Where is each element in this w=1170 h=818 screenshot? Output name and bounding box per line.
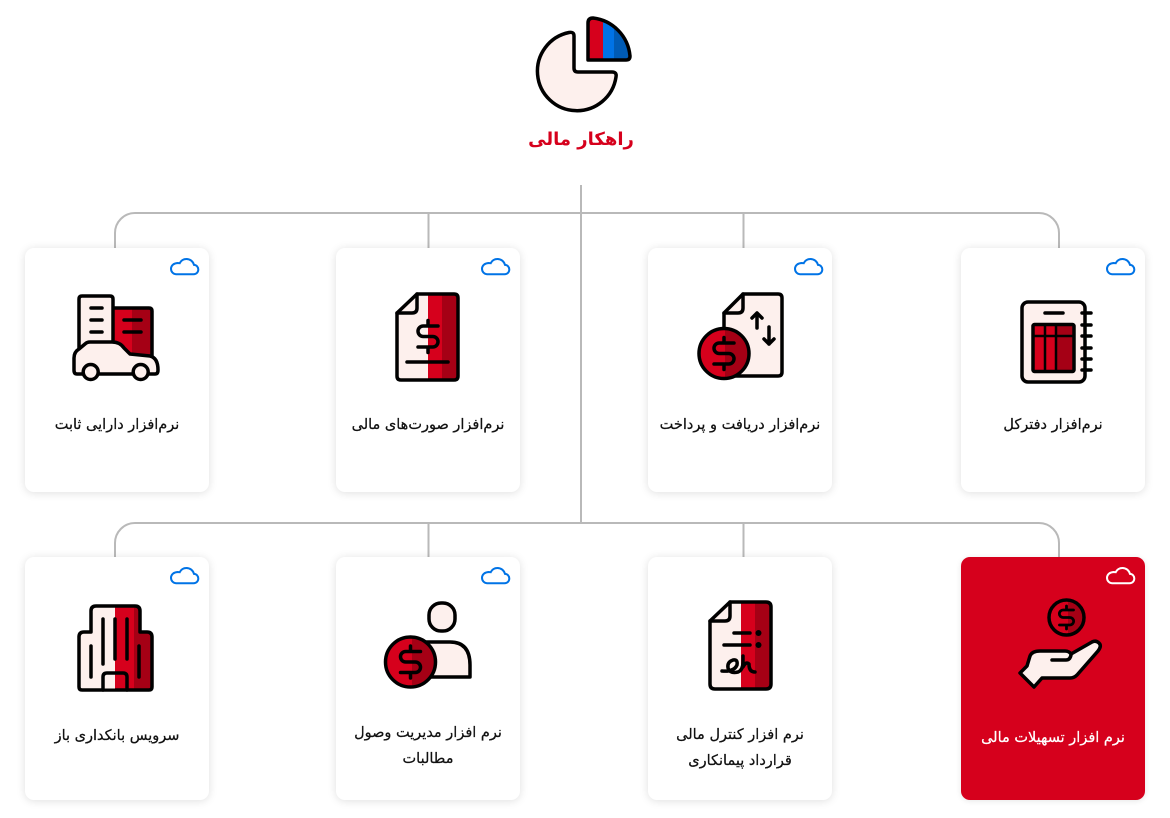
icon: cloud	[794, 258, 824, 276]
icon: bank building	[77, 604, 154, 692]
icon: cloud	[1106, 258, 1136, 276]
label	[354, 725, 502, 767]
icon: buildings and car	[72, 294, 160, 382]
label: نرم‌افزار دارایی ثابت	[55, 417, 179, 433]
icon: person with coin	[384, 601, 472, 689]
icon: signed contract	[708, 600, 773, 691]
label: نرم افزار تسهیلات مالی	[981, 730, 1125, 746]
title: راهکار مالی	[528, 129, 634, 150]
icon: hand with coin	[1018, 598, 1102, 689]
label: نرم افزار کنترل مالی	[676, 727, 804, 743]
panel: receivables management software	[336, 557, 520, 800]
panel: fixed assets software	[25, 248, 209, 492]
panel: ledger software	[961, 248, 1145, 492]
icon: cloud	[481, 258, 510, 276]
label: نرم افزار مدیریت وصول	[354, 725, 502, 741]
icon: cloud	[170, 258, 200, 276]
icon: document with coin and arrows	[697, 292, 784, 380]
icon: cloud	[1106, 567, 1136, 584]
label: نرم‌افزار دفترکل	[1003, 417, 1103, 433]
icon: notebook	[1020, 300, 1093, 384]
icon: pie chart	[536, 16, 632, 112]
label: قرارداد پیمانکاری	[688, 753, 792, 769]
panel: open banking service	[25, 557, 209, 800]
icon: statement document	[395, 292, 460, 382]
panel: financial statements software	[336, 248, 520, 492]
icon: cloud	[481, 567, 510, 584]
icon: cloud	[170, 567, 200, 584]
label: سرویس بانکداری باز	[55, 728, 179, 744]
panel: financial facilities software	[961, 557, 1145, 800]
label	[676, 727, 804, 769]
panel: receipts and payments software	[648, 248, 832, 492]
label: نرم‌افزار دریافت و پرداخت	[660, 417, 820, 433]
panel: financial control and contracting software	[648, 557, 832, 800]
label: مطالبات	[403, 751, 453, 767]
label: نرم‌افزار صورت‌های مالی	[352, 417, 504, 433]
